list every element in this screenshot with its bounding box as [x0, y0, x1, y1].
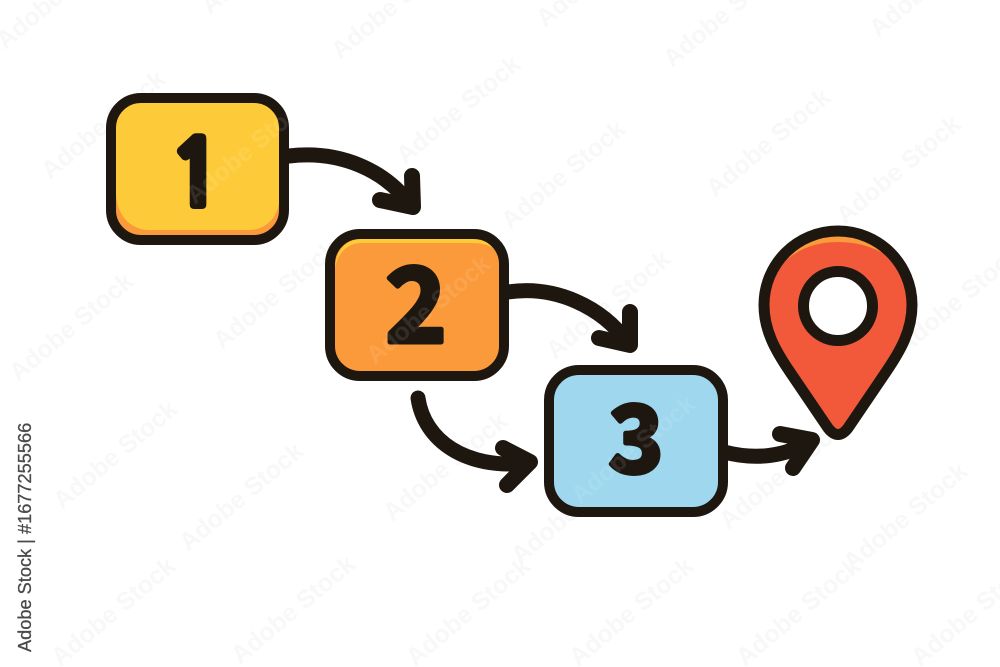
side credit text: Adobe Stock | #1677255566: [15, 423, 35, 652]
watermark over shapes: Adobe Stock: [566, 390, 701, 510]
watermark pattern: Adobe Stock: [701, 83, 836, 203]
icon: location pin: [764, 231, 912, 434]
arrow: step 1 to step 2: [289, 155, 413, 207]
watermark pattern: Adobe Stock: [506, 450, 641, 570]
box: step 3: [549, 366, 723, 512]
watermark pattern: Adobe Stock: [831, 110, 966, 230]
watermark over shapes: [181, 90, 701, 510]
arrow: step 2 to step 3 left side: [418, 398, 530, 485]
watermark over shapes: Adobe Stock: [361, 250, 496, 370]
arrow: step 3 to pin: [724, 434, 812, 468]
watermark pattern: Adobe Stock: [208, 235, 343, 355]
watermark pattern: Adobe Stock: [714, 415, 849, 535]
box: step 1: [111, 98, 284, 240]
watermark pattern: Adobe Stock: [496, 115, 631, 235]
watermark pattern: Adobe Stock: [378, 407, 513, 527]
watermark over shapes: Adobe Stock: [181, 90, 316, 210]
watermark pattern: Adobe Stock: [36, 65, 171, 185]
watermark pattern: Adobe Stock: [391, 50, 526, 170]
watermark pattern: Adobe Stock: [838, 457, 973, 577]
arrow: step 2 to step 3: [508, 291, 630, 345]
number 3: 3: [609, 366, 663, 499]
box: step 2: [330, 223, 504, 376]
watermark pattern: Adobe Stock: [226, 550, 361, 667]
number 1: 1: [169, 130, 223, 219]
watermark pattern: Adobe Stock: [48, 395, 183, 515]
watermark pattern: Adobe Stock: [541, 245, 676, 365]
watermark pattern: Adobe Stock: [174, 437, 309, 557]
number 2: 2: [386, 223, 446, 372]
watermark pattern: Adobe Stock: [4, 267, 139, 387]
